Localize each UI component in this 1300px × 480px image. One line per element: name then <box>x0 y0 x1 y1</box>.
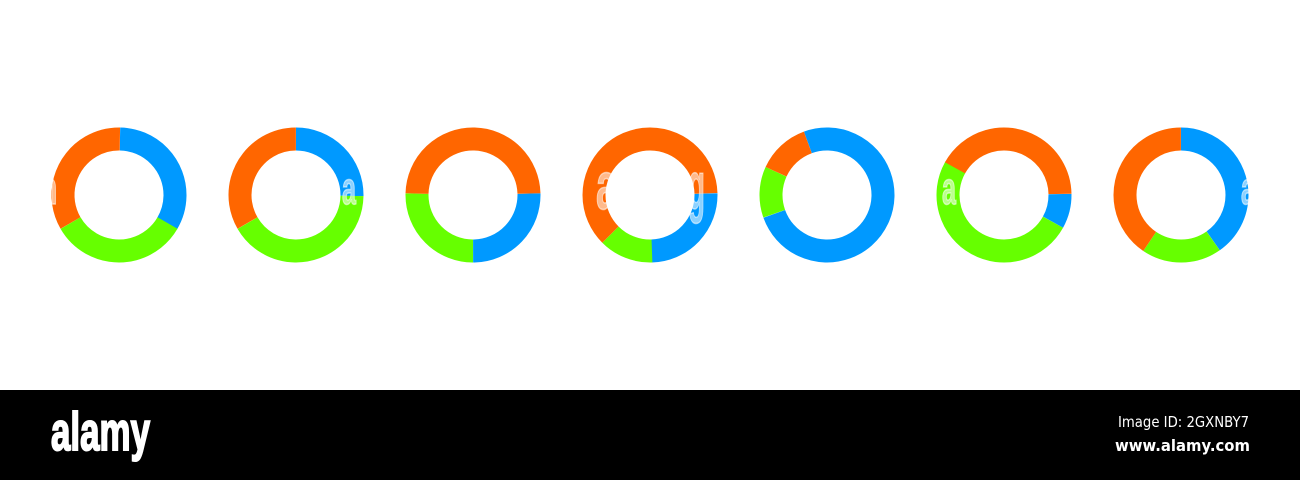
watermark letters over the rings: a <box>596 148 618 224</box>
donut chart 7 <box>1103 117 1259 273</box>
watermark letters over the rings <box>43 148 1256 224</box>
watermark letters over the rings: n <box>43 163 57 214</box>
watermark letters over the rings: a <box>342 163 357 214</box>
donut chart 3 <box>416 138 530 252</box>
donut chart 6 <box>928 119 1080 271</box>
watermark letters over the rings: a <box>1241 163 1256 214</box>
donut chart 1 <box>43 119 195 271</box>
footer band <box>0 390 1300 480</box>
watermark letters over the rings: g <box>688 148 705 224</box>
image id: Image ID: 2GXNBY7 <box>1118 413 1249 431</box>
website: www.alamy.com <box>1115 436 1250 455</box>
donut chart 4 <box>571 116 729 274</box>
donut chart 5 <box>753 121 901 269</box>
donut chart 2 <box>220 119 372 271</box>
watermark letters over the rings: a <box>942 163 957 214</box>
alamy logo: alamy <box>51 402 150 462</box>
